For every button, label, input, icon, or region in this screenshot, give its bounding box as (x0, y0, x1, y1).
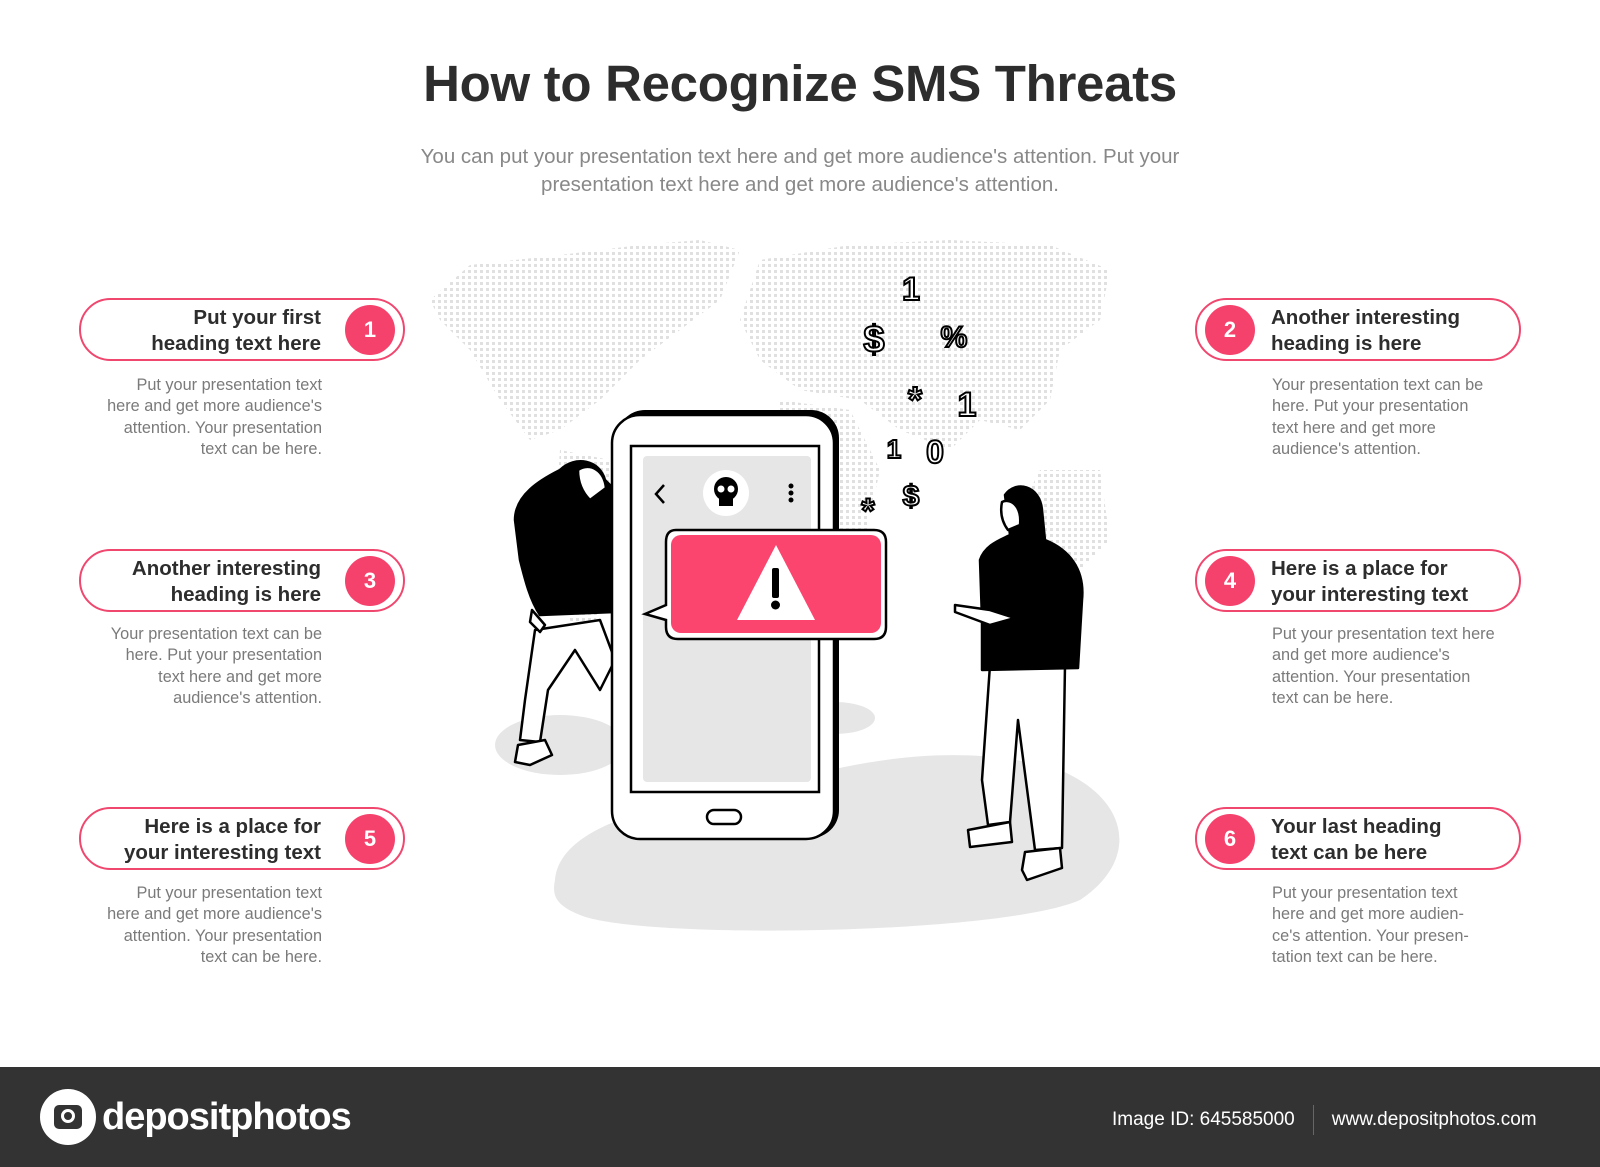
right hacker (955, 487, 1082, 880)
phone (612, 410, 839, 839)
text 3: Your presentation text can be (111, 625, 322, 643)
text 3: here. Put your presentation (126, 646, 322, 664)
text 2: audience's attention. (1272, 440, 1421, 458)
panel 4: 4 (1224, 568, 1236, 593)
floating symbols: $ (863, 319, 885, 361)
text 3: text here and get more (158, 668, 322, 686)
panel 3 (79, 549, 405, 612)
panel 6: Your last heading (1271, 815, 1441, 838)
text 5: attention. Your presentation (124, 927, 322, 945)
icon: back arrow (656, 485, 664, 503)
text 4 (1272, 625, 1495, 707)
subtitle: You can put your presentation text here and get more audience's attention. Put your (421, 145, 1179, 168)
footer logo (40, 1089, 351, 1145)
floating symbols: $ (903, 480, 920, 513)
text 1: attention. Your presentation (124, 419, 322, 437)
icon: skull (703, 470, 749, 516)
text 4: attention. Your presentation (1272, 668, 1470, 686)
panel 6: text can be here (1271, 841, 1427, 864)
text 4: text can be here. (1272, 689, 1393, 707)
panel 2: Another interesting (1271, 306, 1460, 329)
panel 4: Here is a place for (1271, 557, 1448, 580)
text 1: here and get more audience's (107, 397, 322, 415)
panel 5 (79, 807, 405, 870)
panel 4 (1195, 549, 1521, 612)
panel 6: 6 (1224, 826, 1236, 851)
panel 6 (1195, 807, 1521, 870)
panel 5: your interesting text (124, 841, 321, 864)
text 3: audience's attention. (173, 689, 322, 707)
panel 3: Another interesting (132, 557, 321, 580)
text 5 (107, 884, 322, 966)
ground shadows (495, 702, 1119, 931)
icon: menu dots (788, 484, 794, 502)
floating symbols: 0 (926, 434, 944, 470)
floating symbols: 1 (958, 386, 976, 424)
text 2: text here and get more (1272, 419, 1436, 437)
title: How to Recognize SMS Threats (423, 55, 1177, 112)
floating symbols: 1 (902, 271, 920, 307)
footer (0, 1067, 1600, 1167)
panel 5: Here is a place for (144, 815, 321, 838)
footer logo: depositphotos (102, 1096, 351, 1138)
footer info: Image ID: 645585000 www.depositphotos.com (1112, 1109, 1537, 1130)
panel 1 (79, 298, 405, 361)
alert bubble (645, 530, 886, 639)
floating symbols: * (861, 492, 875, 530)
panel 3: 3 (364, 568, 376, 593)
floating symbols: % (941, 321, 967, 354)
text 1 (107, 376, 322, 458)
text 6: tation text can be here. (1272, 948, 1438, 966)
text 4: and get more audience's (1272, 646, 1450, 664)
panel 4: your interesting text (1271, 583, 1468, 606)
left hacker (515, 461, 615, 765)
text 6 (1272, 884, 1469, 966)
panel 2: heading is here (1271, 332, 1421, 355)
panel 1: Put your first (193, 306, 321, 329)
panel 5: 5 (364, 826, 376, 851)
text 3 (111, 625, 322, 707)
panel 2 (1195, 298, 1521, 361)
text 2: here. Put your presentation (1272, 397, 1468, 415)
panel 1: 1 (364, 317, 376, 342)
text 2: Your presentation text can be (1272, 376, 1483, 394)
text 1: text can be here. (201, 440, 322, 458)
panel 3: heading is here (171, 583, 321, 606)
floating symbols (861, 271, 976, 530)
text 4: Put your presentation text here (1272, 625, 1495, 643)
text 1: Put your presentation text (136, 376, 322, 394)
text 6: here and get more audien- (1272, 905, 1464, 923)
text 5: here and get more audience's (107, 905, 322, 923)
text 6: Put your presentation text (1272, 884, 1458, 902)
panel 2: 2 (1224, 317, 1236, 342)
text 2 (1272, 376, 1483, 458)
world map (430, 240, 1110, 640)
subtitle: presentation text here and get more audience's attention. (541, 173, 1059, 196)
text 5: Put your presentation text (136, 884, 322, 902)
subtitle (421, 145, 1179, 196)
text 5: text can be here. (201, 948, 322, 966)
text 6: ce's attention. Your presen- (1272, 927, 1469, 945)
panel 1: heading text here (151, 332, 321, 355)
floating symbols: * (908, 379, 922, 420)
floating symbols: 1 (887, 434, 901, 464)
